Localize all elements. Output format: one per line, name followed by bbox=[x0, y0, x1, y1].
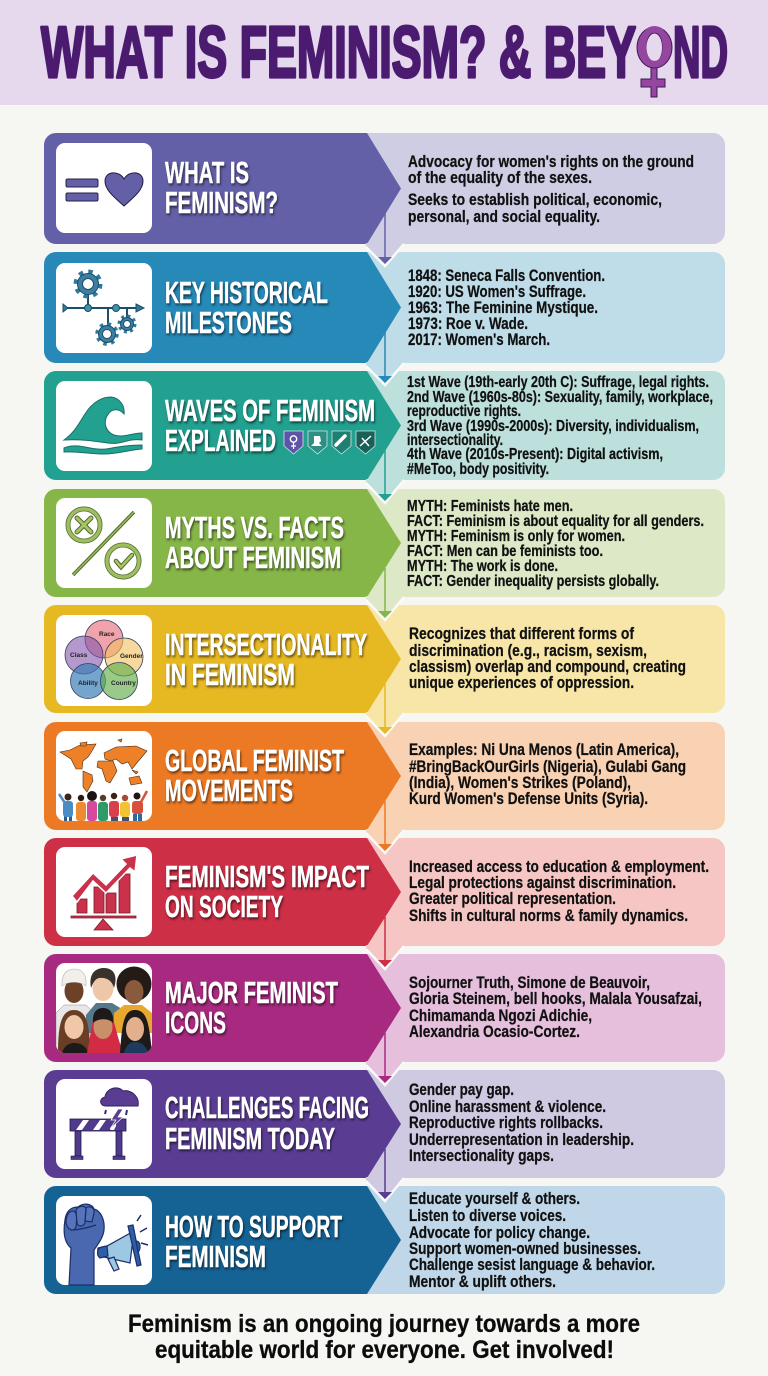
myths and facts list: FACT: Feminism is about equality for all genders. bbox=[407, 513, 704, 530]
actions list: Advocate for policy change. bbox=[409, 1223, 590, 1242]
icon: portraits of six feminists bbox=[56, 963, 152, 1053]
myths and facts list: MYTH: The work is done. bbox=[407, 558, 558, 575]
challenges list: Intersectionality gaps. bbox=[409, 1146, 554, 1165]
challenges list: Online harassment & violence. bbox=[409, 1097, 606, 1116]
description: discrimination (e.g., racism, sexism, bbox=[409, 641, 647, 660]
milestones list: 1848: Seneca Falls Convention. bbox=[408, 266, 605, 285]
heading: FEMINISM bbox=[165, 1239, 266, 1274]
actions list: Challenge sesist language & behavior. bbox=[409, 1255, 655, 1274]
milestones list: 1963: The Feminine Mystique. bbox=[408, 298, 598, 317]
examples list: (India), Women's Strikes (Poland), bbox=[409, 773, 631, 792]
impacts list: Legal protections against discrimination. bbox=[409, 873, 676, 892]
icon: world map and crowd bbox=[56, 731, 152, 821]
icon: four wave shields bbox=[284, 431, 375, 454]
heading: WAVES OF FEMINISM bbox=[165, 393, 375, 428]
heading: FEMINISM TODAY bbox=[165, 1121, 335, 1156]
footer call to action: Feminism is an ongoing journey towards a more bbox=[128, 1310, 640, 1338]
challenges list: Reproductive rights rollbacks. bbox=[409, 1113, 603, 1132]
icon: equals and heart bbox=[56, 143, 152, 233]
heading: FEMINISM'S IMPACT bbox=[165, 859, 369, 894]
row 8: major feminist icons bbox=[44, 954, 725, 1062]
icon: rising bar chart on scale bbox=[56, 847, 152, 937]
icon: barrier under storm cloud bbox=[56, 1079, 152, 1169]
impacts list: Greater political representation. bbox=[409, 889, 616, 908]
title banner: O bbox=[639, 15, 670, 80]
description: Seeks to establish political, economic, bbox=[408, 190, 662, 209]
footer call to action bbox=[128, 1310, 640, 1364]
milestones list: 1920: US Women's Suffrage. bbox=[408, 282, 586, 301]
heading bbox=[165, 975, 338, 1040]
icon: five circle venn diagram: Class bbox=[70, 652, 88, 659]
impacts list bbox=[409, 857, 709, 925]
row 5: intersectionality bbox=[44, 605, 725, 713]
actions list: Support women-owned businesses. bbox=[409, 1239, 641, 1258]
heading: ON SOCIETY bbox=[165, 889, 283, 924]
row 3: waves of feminism bbox=[44, 371, 725, 480]
description: unique experiences of oppression. bbox=[409, 673, 634, 692]
heading: ICONS bbox=[165, 1005, 226, 1040]
description bbox=[409, 624, 686, 692]
description: classism) overlap and compound, creating bbox=[409, 657, 686, 676]
challenges list bbox=[409, 1080, 634, 1165]
milestones list: 1973: Roe v. Wade. bbox=[408, 314, 528, 333]
arrow: row 6 to row 7 bbox=[366, 801, 404, 853]
description: Advocacy for women's rights on the ground bbox=[408, 152, 694, 171]
row 2: key historical milestones bbox=[44, 252, 725, 363]
arrow: row 9 to row 10 bbox=[366, 1149, 404, 1201]
row 6: global movements bbox=[44, 722, 725, 830]
myths and facts list: MYTH: Feminists hate men. bbox=[407, 498, 573, 515]
heading bbox=[165, 627, 367, 692]
icon: raised fist and megaphone bbox=[56, 1196, 152, 1285]
description: of the equality of the sexes. bbox=[408, 168, 592, 187]
examples list: Kurd Women's Defense Units (Syria). bbox=[409, 789, 648, 808]
row 1: what is feminism bbox=[44, 133, 725, 244]
icon: five circle venn diagram: Ability bbox=[78, 680, 98, 687]
arrow: row 1 to row 2 bbox=[366, 213, 404, 266]
heading: CHALLENGES FACING bbox=[165, 1090, 369, 1125]
arrow: row 8 to row 9 bbox=[366, 1033, 404, 1085]
heading: GLOBAL FEMINIST bbox=[165, 743, 344, 778]
heading: HOW TO SUPPORT bbox=[165, 1209, 342, 1244]
heading: KEY HISTORICAL bbox=[165, 275, 328, 310]
heading bbox=[165, 743, 344, 808]
waves list: 4th Wave (2010s-Present): Digital activism, bbox=[407, 446, 663, 463]
icon: five circle venn diagram: Country bbox=[111, 680, 136, 687]
arrow: row 3 to row 4 bbox=[366, 450, 404, 503]
heading: IN FEMINISM bbox=[165, 657, 295, 692]
examples list: #BringBackOurGirls (Nigeria), Gulabi Gang bbox=[409, 757, 686, 776]
arrow: row 7 to row 8 bbox=[366, 917, 404, 969]
heading: MILESTONES bbox=[165, 305, 292, 340]
arrow: row 4 to row 5 bbox=[366, 568, 404, 620]
heading: WHAT IS bbox=[165, 155, 249, 190]
icon: timeline with gears bbox=[56, 263, 152, 353]
milestones list bbox=[408, 266, 605, 349]
examples list bbox=[409, 740, 686, 808]
names list: Alexandria Ocasio-Cortez. bbox=[409, 1022, 580, 1041]
description: personal, and social equality. bbox=[408, 207, 600, 226]
heading: INTERSECTIONALITY bbox=[165, 627, 367, 662]
icon: five circle venn diagram: Race bbox=[99, 631, 115, 638]
heading bbox=[165, 1209, 342, 1274]
heading bbox=[165, 393, 375, 458]
myths and facts list: FACT: Gender inequality persists globally. bbox=[407, 573, 659, 590]
names list: Sojourner Truth, Simone de Beauvoir, bbox=[409, 973, 650, 992]
actions list: Mentor & uplift others. bbox=[409, 1272, 556, 1291]
heading: FEMINISM? bbox=[165, 185, 278, 220]
myths and facts list: FACT: Men can be feminists too. bbox=[407, 543, 603, 560]
footer call to action: equitable world for everyone. Get involved! bbox=[155, 1336, 614, 1364]
description: Recognizes that different forms of bbox=[409, 624, 634, 643]
heading bbox=[165, 510, 344, 575]
heading: MYTHS VS. FACTS bbox=[165, 510, 344, 545]
actions list bbox=[409, 1189, 655, 1291]
description bbox=[408, 152, 694, 226]
row 10: how to support bbox=[44, 1186, 725, 1294]
impacts list: Shifts in cultural norms & family dynamics. bbox=[409, 906, 688, 925]
heading bbox=[165, 275, 328, 340]
arrow: row 2 to row 3 bbox=[366, 332, 404, 385]
waves list: intersectionality. bbox=[407, 432, 503, 449]
myths and facts list bbox=[407, 498, 704, 590]
milestones list: 2017: Women's March. bbox=[408, 330, 550, 349]
challenges list: Underrepresentation in leadership. bbox=[409, 1130, 634, 1149]
icon: five circle venn diagram bbox=[56, 615, 152, 706]
row 7: impact on society bbox=[44, 838, 725, 946]
myths and facts list: MYTH: Feminism is only for women. bbox=[407, 528, 625, 545]
waves list: reproductive rights. bbox=[407, 403, 521, 420]
heading bbox=[165, 1090, 369, 1156]
heading bbox=[165, 859, 369, 924]
examples list: Examples: Ni Una Menos (Latin America), bbox=[409, 740, 679, 759]
waves list bbox=[407, 374, 713, 478]
actions list: Educate yourself & others. bbox=[409, 1189, 580, 1208]
impacts list: Increased access to education & employment. bbox=[409, 857, 709, 876]
actions list: Listen to diverse voices. bbox=[409, 1206, 566, 1225]
waves list: #MeToo, body positivity. bbox=[407, 461, 549, 478]
challenges list: Gender pay gap. bbox=[409, 1080, 514, 1099]
heading: MAJOR FEMINIST bbox=[165, 975, 338, 1010]
heading: MOVEMENTS bbox=[165, 773, 293, 808]
arrow: row 5 to row 6 bbox=[366, 684, 404, 736]
heading: ABOUT FEMINISM bbox=[165, 540, 341, 575]
names list: Chimamanda Ngozi Adichie, bbox=[409, 1006, 592, 1025]
names list bbox=[409, 973, 702, 1041]
names list: Gloria Steinem, bell hooks, Malala Yousafzai, bbox=[409, 989, 702, 1008]
row 9: challenges bbox=[44, 1070, 725, 1178]
icon: wave bbox=[56, 381, 152, 471]
heading: EXPLAINED bbox=[165, 423, 276, 458]
heading bbox=[165, 155, 278, 220]
icon: myth and fact percent sign bbox=[56, 498, 152, 588]
icon: five circle venn diagram: Gender bbox=[120, 653, 143, 660]
waves list: 3rd Wave (1990s-2000s): Diversity, individualism, bbox=[407, 418, 699, 435]
row 4: myths vs facts bbox=[44, 489, 725, 597]
